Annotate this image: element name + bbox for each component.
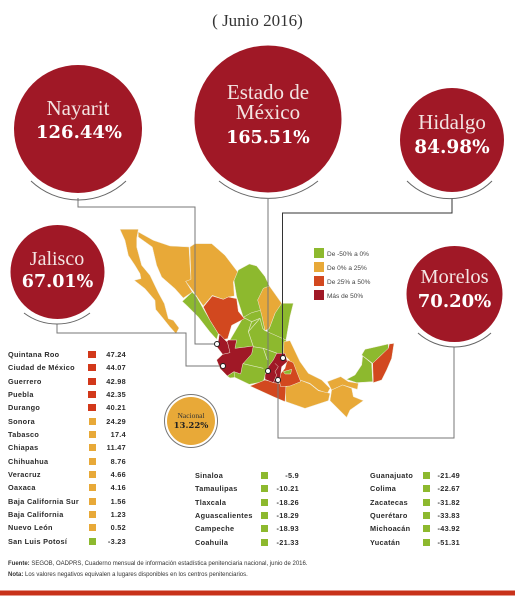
table: left column: 8.76 — [111, 457, 126, 466]
table: left column: Ciudad de México — [8, 363, 75, 372]
table: right column: Yucatán — [370, 538, 400, 547]
table: middle column: -10.21 — [276, 484, 299, 493]
table: left column: 44.07 — [106, 363, 126, 372]
bubble: Nayarit — [14, 65, 142, 200]
table: middle column: -21.33 — [276, 538, 299, 547]
location dots — [214, 342, 286, 382]
table: right column — [370, 471, 460, 547]
table: left column: Baja California Sur — [8, 497, 79, 506]
table: middle column — [195, 471, 299, 547]
table: left column: Baja California — [8, 510, 64, 519]
table: left column: Veracruz — [8, 470, 41, 479]
bubble: Estado de México: Estado de — [227, 80, 309, 104]
table: left column: Oaxaca — [8, 483, 36, 492]
bubble: Estado de México: 165.51% — [226, 128, 310, 148]
national badge: 13.22% — [174, 421, 208, 431]
legend: De 0% a 25% — [327, 265, 367, 272]
table: left column: Puebla — [8, 390, 34, 399]
table: right column: Zacatecas — [370, 498, 408, 507]
title: date: ( Junio 2016) — [212, 11, 303, 30]
table: middle column: Tlaxcala — [195, 498, 227, 507]
table: right column: Colima — [370, 484, 397, 493]
table: middle column: Tamaulipas — [195, 484, 238, 493]
bubble: Nayarit: Nayarit — [47, 96, 110, 120]
table: right column: -21.49 — [438, 471, 460, 480]
connector: Hidalgo — [282, 199, 452, 358]
table: left column: 1.23 — [111, 510, 126, 519]
table: middle column: Coahuila — [195, 538, 229, 547]
bubble: Hidalgo: Hidalgo — [418, 110, 486, 134]
connector: Estado de México — [267, 199, 269, 370]
legend: Más de 50% — [327, 293, 363, 300]
table: left column: Chiapas — [8, 443, 38, 452]
table: left column: 42.35 — [106, 390, 126, 399]
national badge — [164, 394, 218, 448]
table: left column: Chihuahua — [8, 457, 49, 466]
table: right column: -22.67 — [438, 484, 460, 493]
bubble: Estado de México — [194, 46, 342, 198]
bubble: Nayarit: 126.44% — [36, 122, 122, 143]
bubble: Hidalgo: 84.98% — [414, 137, 490, 158]
bubble: Jalisco: 67.01% — [22, 272, 94, 292]
footer bar — [0, 590, 515, 596]
bubble: Estado de México: México — [236, 100, 300, 124]
table: left column: Tabasco — [8, 430, 39, 439]
connector: Morelos — [278, 347, 454, 438]
bubble: Jalisco: Jalisco — [30, 248, 84, 270]
source note — [8, 561, 308, 578]
table: right column: Guanajuato — [370, 471, 413, 480]
table: right column: -51.31 — [438, 538, 460, 547]
table: left column: 24.29 — [106, 417, 126, 426]
table: left column: 4.66 — [111, 470, 126, 479]
table: middle column: -18.26 — [276, 498, 299, 507]
table: left column: 42.98 — [106, 377, 126, 386]
bubble: Morelos — [406, 246, 502, 347]
legend: De 25% a 50% — [327, 279, 371, 286]
table: left column: 40.21 — [106, 403, 126, 412]
table: left column: 4.16 — [111, 483, 126, 492]
legend: De -50% a 0% — [327, 251, 369, 258]
connector: Nayarit — [78, 198, 217, 344]
bubble: Jalisco — [10, 225, 104, 324]
table: middle column: -18.93 — [276, 524, 299, 533]
table: left column: Guerrero — [8, 377, 42, 386]
connector: Jalisco — [57, 324, 223, 366]
table: middle column: Sinaloa — [195, 471, 224, 480]
table: left column: 17.4 — [111, 430, 127, 439]
table: right column: Querétaro — [370, 511, 408, 520]
table: left column: 0.52 — [111, 523, 126, 532]
table: middle column: -18.29 — [276, 511, 299, 520]
source note: Nota: Los valores negativos equivalen a lugares disponibles en los centros penitenciarios. — [8, 572, 248, 578]
bubble: Hidalgo — [400, 88, 504, 199]
table: left column: San Luis Potosí — [8, 537, 68, 546]
bubble: Morelos: 70.20% — [418, 291, 491, 312]
table: right column: -33.83 — [438, 511, 460, 520]
table: middle column: -5.9 — [285, 471, 299, 480]
bubble: Morelos: Morelos — [420, 266, 489, 288]
table: left column: Nuevo León — [8, 523, 53, 532]
national badge: Nacional — [177, 411, 205, 420]
table: left column: -3.23 — [108, 537, 126, 546]
table: left column: 1.56 — [111, 497, 126, 506]
table: left column: 11.47 — [107, 443, 126, 452]
table: left column — [8, 350, 127, 546]
table: right column: Michoacán — [370, 524, 410, 533]
table: left column: 47.24 — [106, 350, 127, 359]
table: right column: -31.82 — [438, 498, 460, 507]
table: left column: Durango — [8, 403, 40, 412]
legend — [314, 248, 371, 300]
source note: Fuente: SEGOB, OADPRS, Cuaderno mensual de información estadística penitenciaria nacional, junio de 2016. — [8, 561, 308, 567]
table: right column: -43.92 — [438, 524, 460, 533]
table: middle column: Campeche — [195, 524, 234, 533]
table: left column: Quintana Roo — [8, 350, 60, 359]
table: middle column: Aguascalientes — [195, 511, 253, 520]
map of Mexico — [120, 229, 394, 417]
table: left column: Sonora — [8, 417, 36, 426]
